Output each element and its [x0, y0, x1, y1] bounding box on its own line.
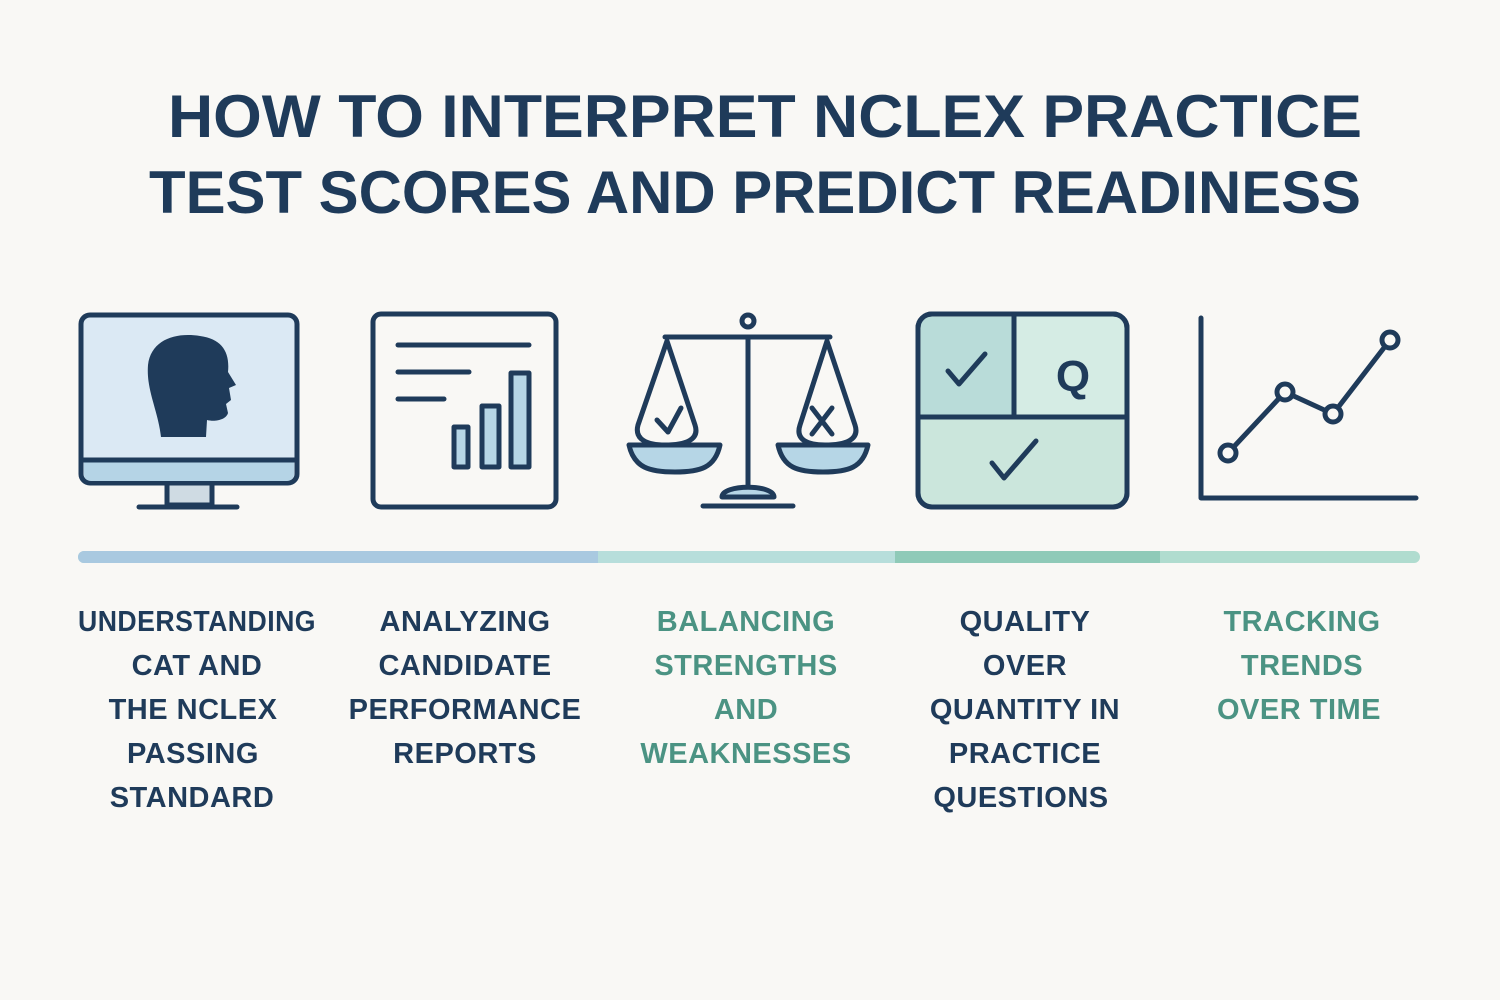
labels: [78, 606, 1381, 814]
icon: balance scale: [629, 315, 868, 506]
label: analyzing reports: ANALYZING: [380, 606, 550, 638]
label: analyzing reports: REPORTS: [393, 738, 537, 770]
label: tracking trends: OVER TIME: [1217, 694, 1381, 726]
title: HOW TO INTERPRET NCLEX PRACTICE: [168, 83, 1362, 150]
label: understanding CAT: PASSING: [127, 738, 259, 770]
title: [149, 83, 1362, 226]
label: balancing strengths: WEAKNESSES: [640, 738, 852, 770]
label: quality over quantity: QUESTIONS: [933, 782, 1109, 814]
label: tracking trends: TRENDS: [1241, 650, 1363, 682]
icon: monitor with head: [81, 315, 297, 507]
icon: trend chart: [1201, 318, 1416, 498]
label: understanding CAT: CAT AND: [132, 650, 262, 682]
label: understanding CAT: STANDARD: [110, 782, 274, 814]
icon: quality grid: Q: [1056, 352, 1090, 401]
label: understanding CAT: UNDERSTANDING: [78, 606, 316, 638]
label: tracking trends: TRACKING: [1223, 606, 1381, 638]
label: understanding CAT: THE NCLEX: [109, 694, 278, 726]
label: analyzing reports: CANDIDATE: [378, 650, 552, 682]
title: TEST SCORES AND PREDICT READINESS: [149, 159, 1361, 226]
label: quality over quantity: QUALITY: [960, 606, 1090, 638]
label: quality over quantity: OVER: [983, 650, 1067, 682]
label: balancing strengths: BALANCING: [657, 606, 835, 638]
label: balancing strengths: STRENGTHS: [654, 650, 838, 682]
label: quality over quantity: QUANTITY IN: [930, 694, 1120, 726]
icon: performance report: [373, 314, 556, 507]
label: quality over quantity: PRACTICE: [949, 738, 1101, 770]
label: analyzing reports: PERFORMANCE: [349, 694, 581, 726]
progress bar: [78, 551, 1420, 563]
label: balancing strengths: AND: [714, 694, 778, 726]
icon: quality grid: [918, 314, 1127, 507]
